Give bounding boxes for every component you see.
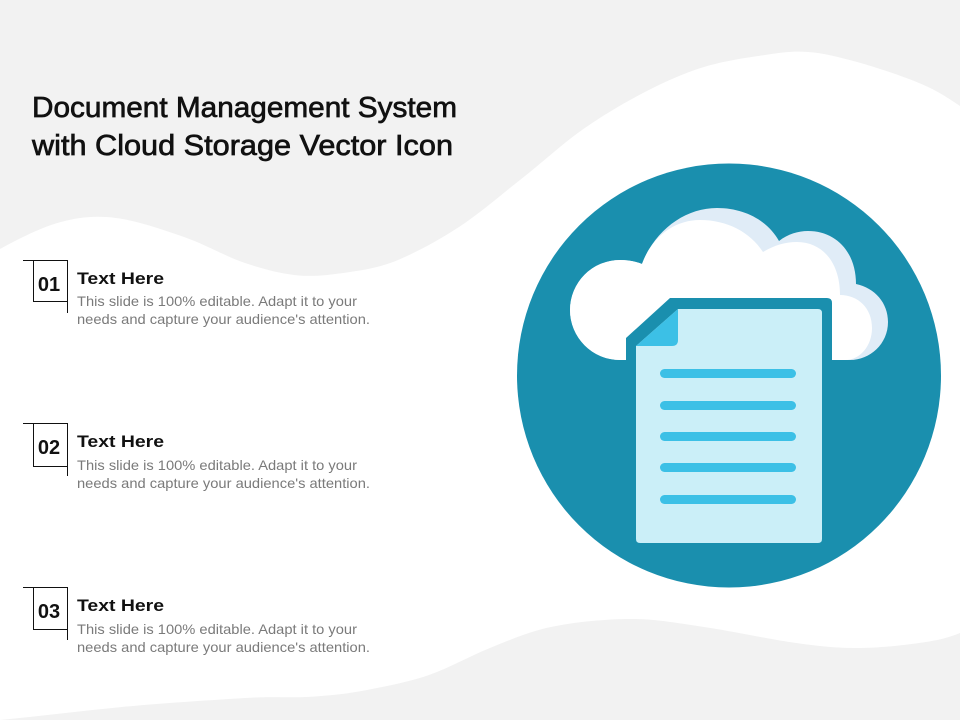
- heading 02: Text Here: [77, 432, 164, 451]
- number badge 01: [23, 260, 68, 313]
- body text 02: This slide is 100% editable. Adapt it to your: [77, 457, 357, 473]
- icon: document and cloud: [517, 164, 941, 588]
- title: Document Management System: [32, 92, 457, 124]
- number badge 01: 01: [38, 274, 60, 296]
- heading 01: Text Here: [77, 269, 164, 288]
- teal circle: [517, 164, 941, 588]
- body text 03: [77, 621, 370, 655]
- number badge 03: [23, 588, 68, 640]
- document back: [626, 298, 832, 360]
- item 01: [23, 260, 370, 327]
- body text 01: [77, 293, 370, 327]
- icon: document: [626, 298, 832, 543]
- title: with Cloud Storage Vector Icon: [31, 130, 453, 162]
- body text 01: needs and capture your audience's attention.: [77, 311, 370, 327]
- body text 01: This slide is 100% editable. Adapt it to your: [77, 293, 357, 309]
- body text 02: [77, 457, 370, 491]
- heading 03: Text Here: [77, 596, 164, 615]
- body text 03: This slide is 100% editable. Adapt it to your: [77, 621, 357, 637]
- text lines: [660, 369, 796, 504]
- body text 03: needs and capture your audience's attention.: [77, 639, 370, 655]
- item 02: [23, 424, 370, 491]
- title: [31, 92, 457, 162]
- page fold: [636, 309, 678, 346]
- number badge 03: 03: [38, 601, 60, 623]
- body text 02: needs and capture your audience's attention.: [77, 475, 370, 491]
- number badge 02: [23, 424, 68, 476]
- item 03: [23, 588, 370, 655]
- icon: cloud: [570, 208, 888, 360]
- document page: [636, 309, 822, 543]
- number badge 02: 02: [38, 437, 60, 459]
